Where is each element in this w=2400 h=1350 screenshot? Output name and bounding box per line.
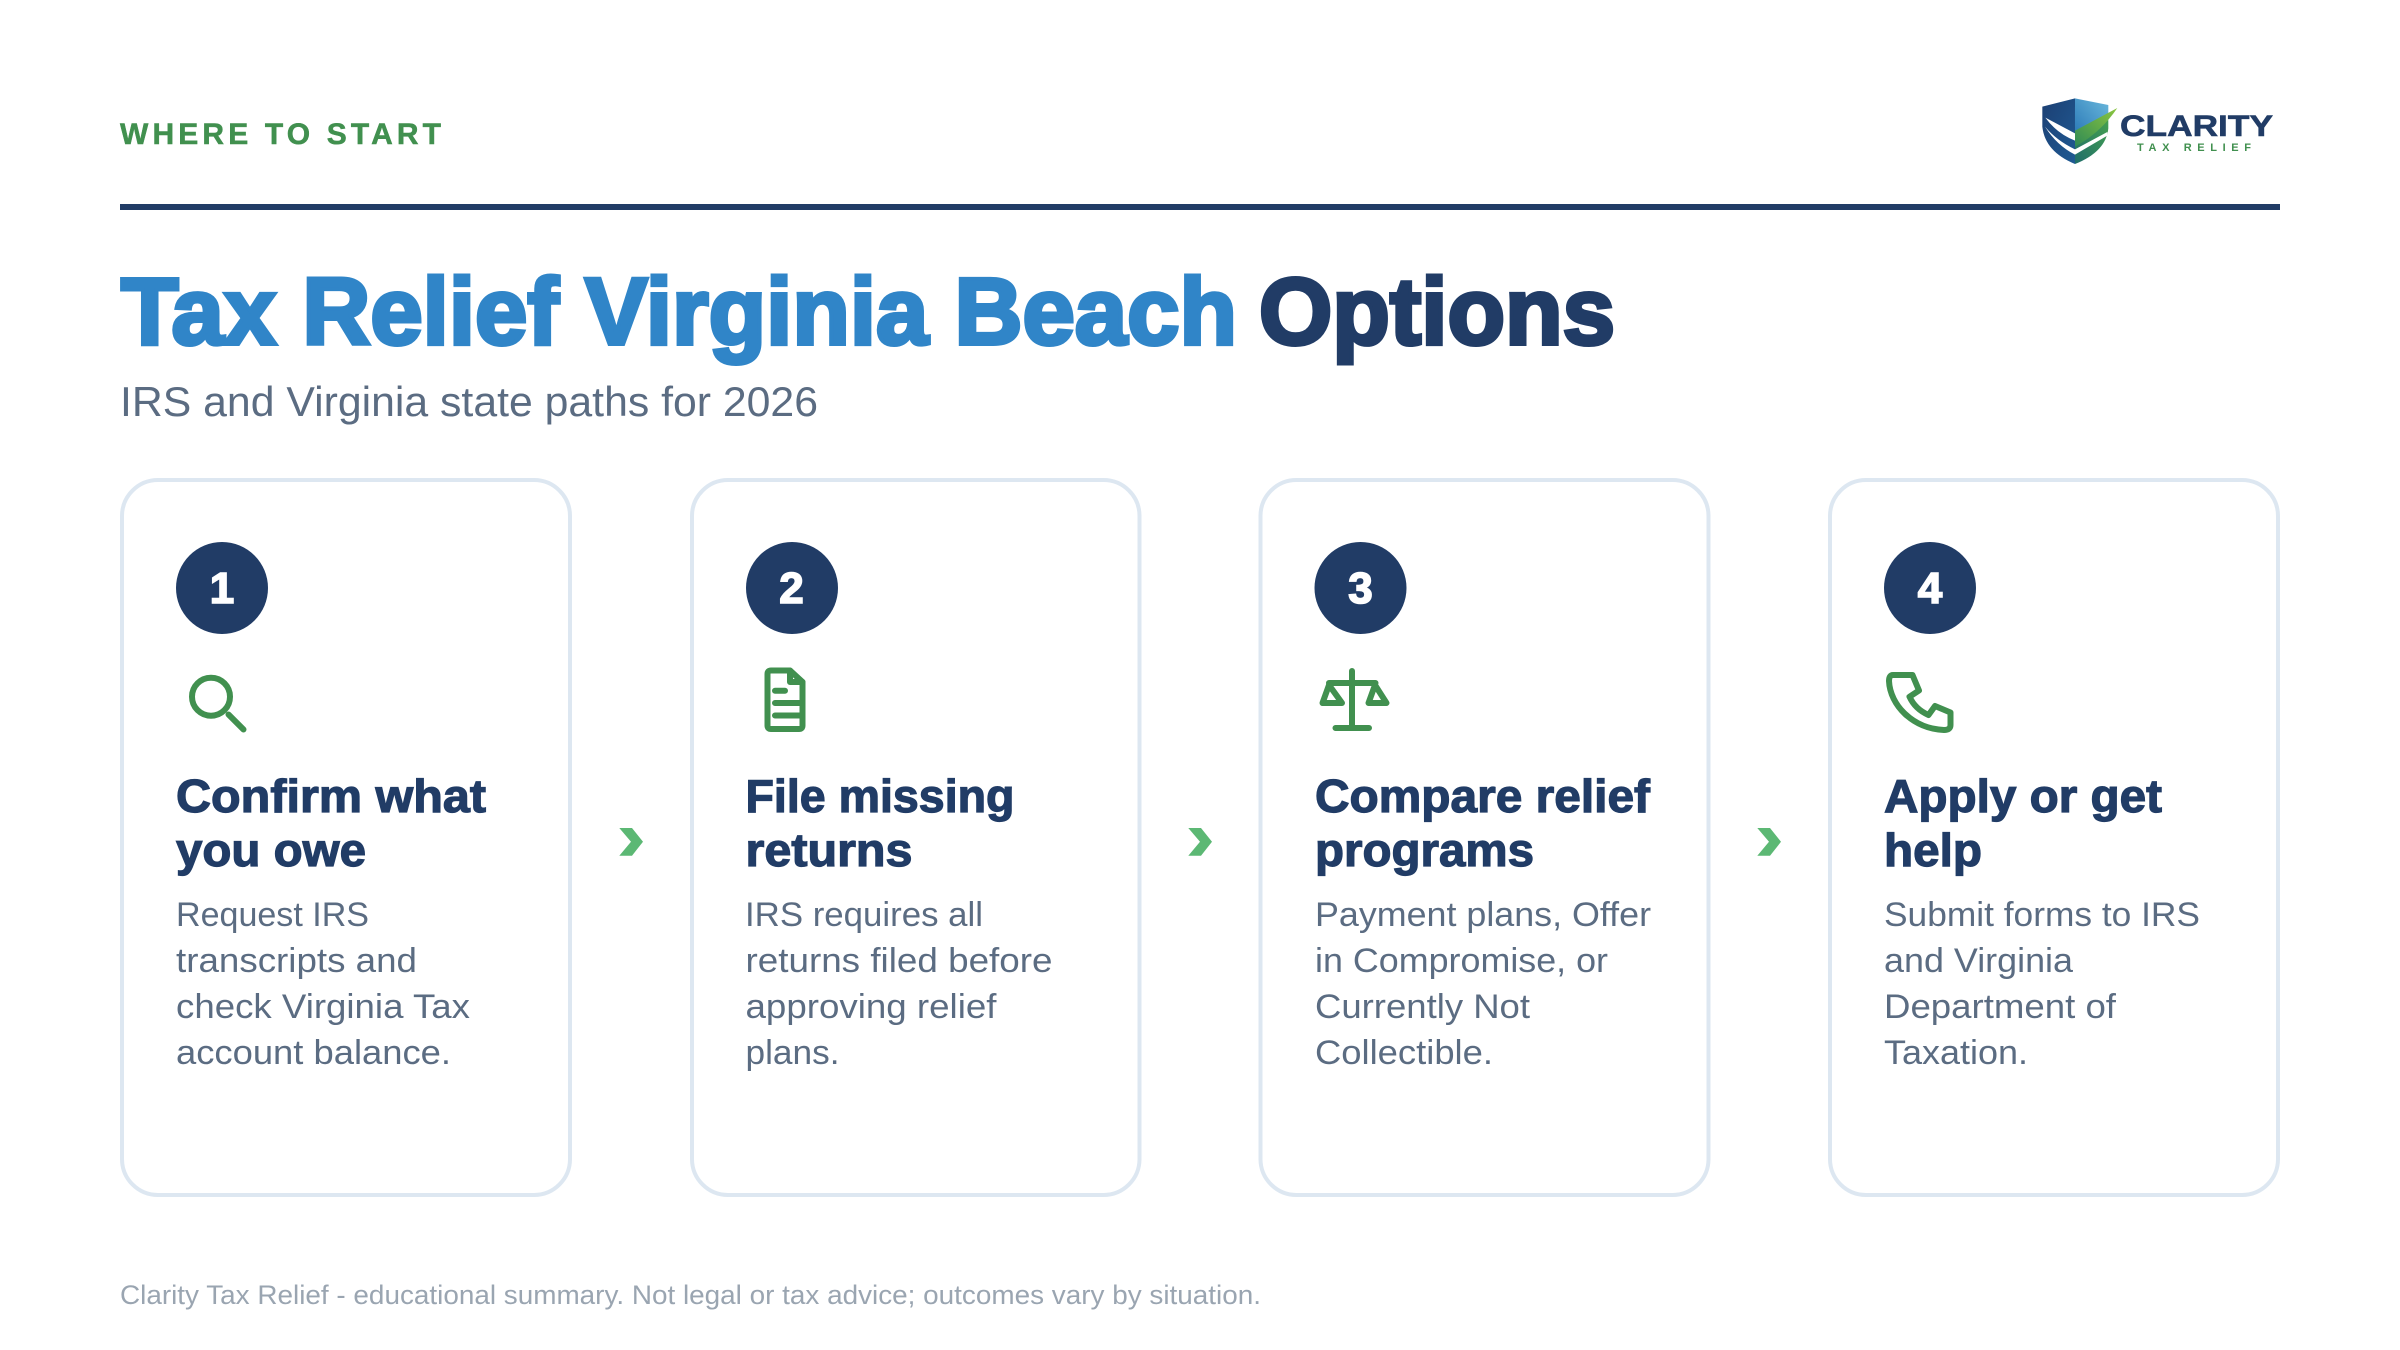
arrow 3: [1757, 828, 1781, 856]
panel: step 2: [692, 480, 1140, 1195]
step 2 description: returns filed before: [746, 942, 1052, 980]
step 1 heading: [176, 770, 486, 876]
number badge 4: [1884, 542, 1976, 634]
card outline: [1830, 480, 2278, 1195]
eyebrow label: WHERE TO START: [120, 118, 441, 151]
title dark part: Options: [1259, 259, 1615, 365]
icon: phone: [1889, 675, 1950, 730]
step 4 description: Taxation.: [1884, 1034, 2028, 1072]
number badge 2: [746, 542, 838, 634]
step 4 heading: help: [1884, 824, 1982, 876]
step 2 description: plans.: [746, 1034, 840, 1072]
number badge 2: 2: [779, 564, 804, 613]
step 4 description: and Virginia: [1884, 942, 2073, 980]
card outline: [692, 480, 1140, 1195]
step 2 description: [745, 896, 1052, 1072]
step 2 description: IRS requires all: [745, 896, 983, 934]
subtitle: IRS and Virginia state paths for 2026: [120, 378, 818, 425]
number badge 4: 4: [1918, 564, 1943, 613]
step 1 description: account balance.: [176, 1034, 451, 1072]
logo shield: [2042, 98, 2117, 164]
step 3 description: Collectible.: [1315, 1034, 1493, 1072]
step 2 description: approving relief: [746, 988, 997, 1026]
step 1 description: Request IRS: [176, 896, 369, 934]
step 3 description: [1315, 896, 1651, 1072]
card outline: [122, 480, 570, 1195]
step 2 heading: [746, 770, 1014, 876]
card outline: [1260, 480, 1708, 1195]
step 3 description: Payment plans, Offer: [1315, 896, 1651, 934]
step 4 description: [1884, 896, 2200, 1072]
step 3 heading: Compare relief: [1315, 770, 1651, 822]
step 1 heading: Confirm what: [176, 770, 486, 822]
step 3 description: in Compromise, or: [1315, 942, 1608, 980]
icon: document: [768, 670, 802, 729]
step 1 description: transcripts and: [176, 942, 417, 980]
step 1 description: [176, 896, 470, 1072]
step 4 description: Submit forms to IRS: [1884, 896, 2200, 934]
icon: balance scale: [1322, 671, 1386, 728]
step 3 description: Currently Not: [1315, 988, 1531, 1026]
step 1 heading: you owe: [176, 824, 366, 876]
title: [121, 259, 1615, 365]
number badge 1: 1: [210, 564, 234, 613]
panel: step 3: [1260, 480, 1708, 1195]
panel: step 4: [1830, 480, 2278, 1195]
icon: magnifying glass: [192, 678, 244, 730]
step 2 heading: File missing: [746, 770, 1014, 822]
header rule: [120, 204, 2280, 210]
title highlighted part: Tax Relief Virginia Beach: [121, 259, 1237, 365]
logo wordmark: CLARITY: [2120, 110, 2273, 143]
step 4 description: Department of: [1884, 988, 2117, 1026]
logo: [2042, 98, 2273, 164]
step 3 heading: [1315, 770, 1651, 876]
number badge 3: [1314, 542, 1406, 634]
panel: step 1: [122, 480, 570, 1195]
step 3 heading: programs: [1315, 824, 1534, 876]
step 4 heading: Apply or get: [1884, 770, 2162, 822]
step 4 heading: [1884, 770, 2162, 876]
footer disclaimer: Clarity Tax Relief - educational summary. Not legal or tax advice; outcomes vary by situation.: [120, 1280, 1261, 1310]
arrow 2: [1188, 828, 1212, 856]
step 2 heading: returns: [746, 824, 912, 876]
logo tagline: TAX RELIEF: [2137, 142, 2251, 154]
step 1 description: check Virginia Tax: [176, 988, 470, 1026]
number badge 3: 3: [1348, 564, 1373, 613]
number badge 1: [176, 542, 268, 634]
arrow 1: [619, 828, 643, 856]
